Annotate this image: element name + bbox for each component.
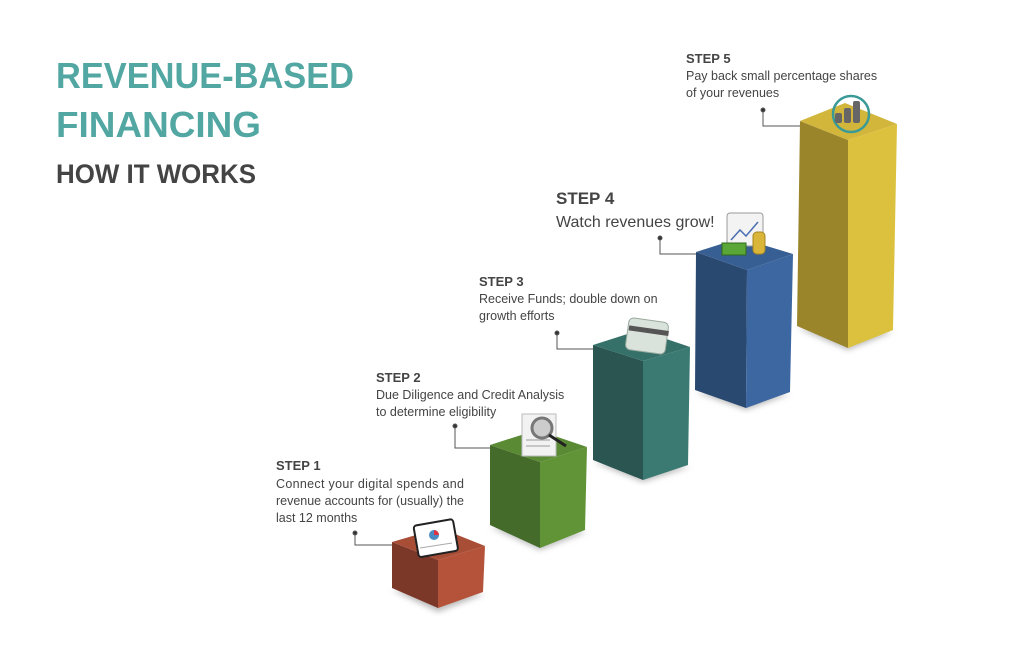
step 2 text: Due Diligence and Credit Analysis bbox=[376, 388, 564, 402]
step 3 text: STEP 3 bbox=[479, 274, 524, 289]
step 1 text: Connect your digital spends and bbox=[276, 477, 464, 491]
step 5 text: of your revenues bbox=[686, 86, 779, 100]
step 5 text bbox=[686, 51, 877, 100]
step 3 text: Receive Funds; double down on bbox=[479, 292, 658, 306]
box: step 1 red bbox=[392, 519, 485, 612]
step 1 text bbox=[276, 458, 464, 525]
icon: chart money coins bbox=[722, 213, 765, 255]
step 4 text: STEP 4 bbox=[556, 189, 615, 208]
step 4 text bbox=[556, 189, 715, 231]
title: REVENUE-BASED bbox=[56, 55, 354, 96]
icon: magnifier document bbox=[522, 414, 566, 456]
step 2 text: STEP 2 bbox=[376, 370, 421, 385]
icon: cycle chart bbox=[833, 96, 869, 132]
step 3 text bbox=[479, 274, 658, 323]
step 1 text: STEP 1 bbox=[276, 458, 321, 473]
step 5 text: Pay back small percentage shares bbox=[686, 69, 877, 83]
box: step 3 teal bbox=[593, 317, 690, 482]
step 1 text: revenue accounts for (usually) the bbox=[276, 494, 464, 508]
title bbox=[56, 55, 354, 189]
step 2 text bbox=[376, 370, 564, 419]
box: step 2 green bbox=[490, 414, 587, 550]
step 5 text: STEP 5 bbox=[686, 51, 731, 66]
connectors bbox=[353, 108, 800, 545]
step 3 text: growth efforts bbox=[479, 309, 555, 323]
step 1 text: last 12 months bbox=[276, 511, 357, 525]
icon: card reader bbox=[625, 317, 669, 355]
step 4 text: Watch revenues grow! bbox=[556, 214, 715, 231]
step 2 text: to determine eligibility bbox=[376, 405, 497, 419]
box: step 5 yellow bbox=[797, 96, 897, 350]
title: FINANCING bbox=[56, 104, 261, 145]
box: step 4 blue bbox=[695, 213, 793, 410]
icon: document stack bbox=[413, 519, 458, 557]
title: HOW IT WORKS bbox=[56, 159, 256, 189]
